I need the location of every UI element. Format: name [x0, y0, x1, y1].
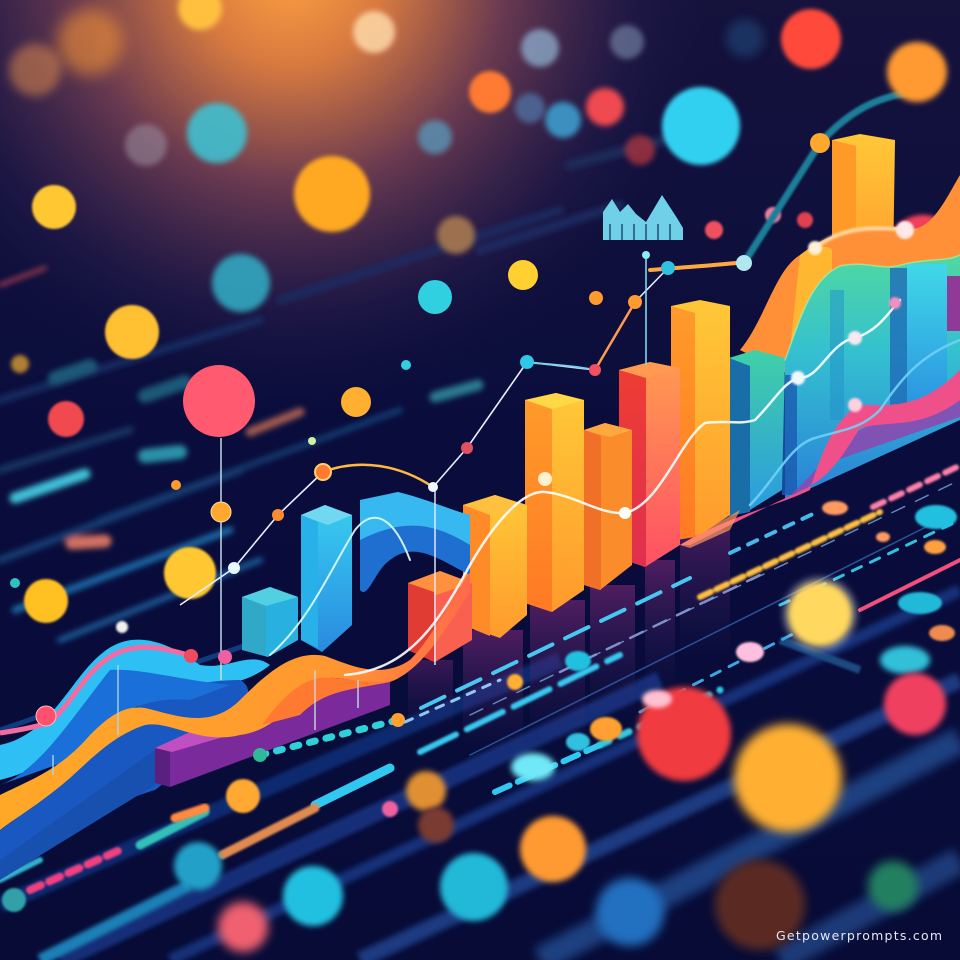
line chart with markers: [53, 255, 668, 775]
bar: teal: [729, 350, 785, 516]
wave: blue body: [0, 640, 270, 780]
bar: purple: [155, 680, 390, 787]
floor bands: [0, 590, 960, 960]
wave: orange behind right columns: [740, 175, 960, 380]
wave: pink ribbon: [0, 647, 191, 733]
wave: deep blue to edge: [0, 750, 155, 880]
teal rising line to top right: [744, 92, 917, 263]
bar: blue: [301, 505, 352, 652]
bar: red orange: [619, 362, 680, 567]
white curve lines: [270, 228, 960, 675]
column: dark gaps and cyan: [782, 264, 960, 495]
bar: tall orange far right: [832, 134, 895, 275]
bars: left group: [242, 505, 472, 662]
wave: purple: [790, 385, 960, 495]
wave: pink ribbon: [680, 370, 960, 545]
bar edge fade: [680, 510, 740, 548]
bar reflections: [408, 530, 730, 750]
bar: yellow orange: [525, 393, 584, 612]
wave: orange ribbon: [0, 572, 470, 830]
bar: red: [408, 571, 472, 662]
icon: mini mountain chart: [603, 195, 683, 240]
bokeh circles: background: [9, 0, 841, 623]
wave: deep blue: [0, 680, 248, 870]
bars: central group: [463, 300, 730, 638]
background streaks: [0, 130, 700, 640]
right columns: [782, 255, 960, 500]
bar: small cyan: [242, 587, 298, 657]
watermark: Getpowerprompts.com: [776, 928, 943, 943]
column: green gradient: [785, 255, 960, 500]
waves right foreground: [680, 370, 960, 548]
waves left: [0, 572, 470, 880]
floor dashed lines: [0, 467, 960, 890]
bar: orange: [463, 495, 527, 638]
blue wave behind left bars: [360, 492, 470, 592]
bar: orange short: [584, 423, 632, 590]
markers: [36, 133, 914, 762]
bar: yellow orange tallest centre: [671, 300, 730, 541]
red blob behind wave: [885, 215, 960, 275]
